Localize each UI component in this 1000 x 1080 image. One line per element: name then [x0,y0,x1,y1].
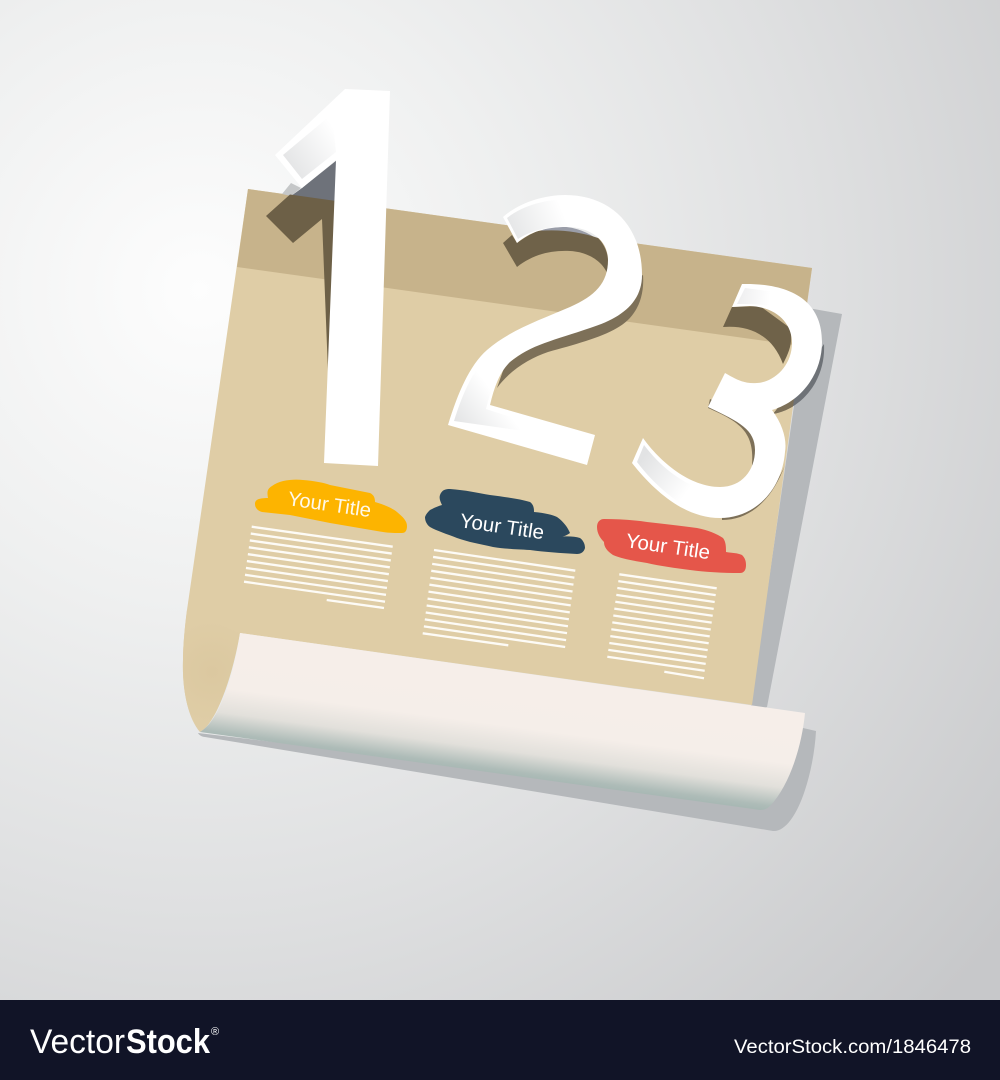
footer logo: Vector [30,1023,125,1061]
left curl underside [183,610,240,732]
flap drop shadow [198,725,816,831]
fold shading of 3 bottom [637,445,700,512]
footer logo: ® [211,1026,219,1038]
numeral 3 [632,284,822,518]
fold shading of 2 bottom [454,335,530,431]
title text: yellow: Your Title [286,488,373,522]
title blob: red [597,519,746,573]
shadow of 1 on paper [266,194,336,372]
title text: red: Your Title [624,530,712,564]
paper sheet [183,189,812,732]
text lines: column 1 [244,527,393,608]
shadow of 3 right on paper [774,399,794,414]
fold shading of 3 top [737,288,775,306]
title blob: yellow [255,480,407,533]
title blob: navy [425,489,585,554]
shadow of 1 dark grey part [291,160,337,202]
title text: navy: Your Title [458,510,546,544]
fold shading of 2 top [507,199,572,239]
numeral shadows [266,160,824,520]
shadow of 1 on background [282,183,301,196]
shadow of 2 upper [503,230,608,273]
rolled flap [200,633,805,810]
shadow of 3 lower [708,399,756,466]
shadow of 2 grey sliver [538,227,598,240]
dark top band [237,189,812,346]
shadow of 3 right grey [773,344,824,414]
footer url: VectorStock.com/1846478 [734,1037,971,1058]
text lines: column 2 [423,550,575,647]
shadow of 3 upper [723,306,791,364]
shadow of 2 lower [490,275,643,408]
shadow of 3 bottom edge [722,465,785,520]
numeral 1 [275,89,390,466]
numeral 2 [448,195,642,465]
footer logo: Stock [126,1023,210,1061]
fold shading of 1 [283,114,336,179]
sheet drop shadow: right side [750,308,842,712]
footer logo [30,1023,219,1061]
text lines: column 3 [607,574,717,678]
footer bar [0,1000,1000,1080]
